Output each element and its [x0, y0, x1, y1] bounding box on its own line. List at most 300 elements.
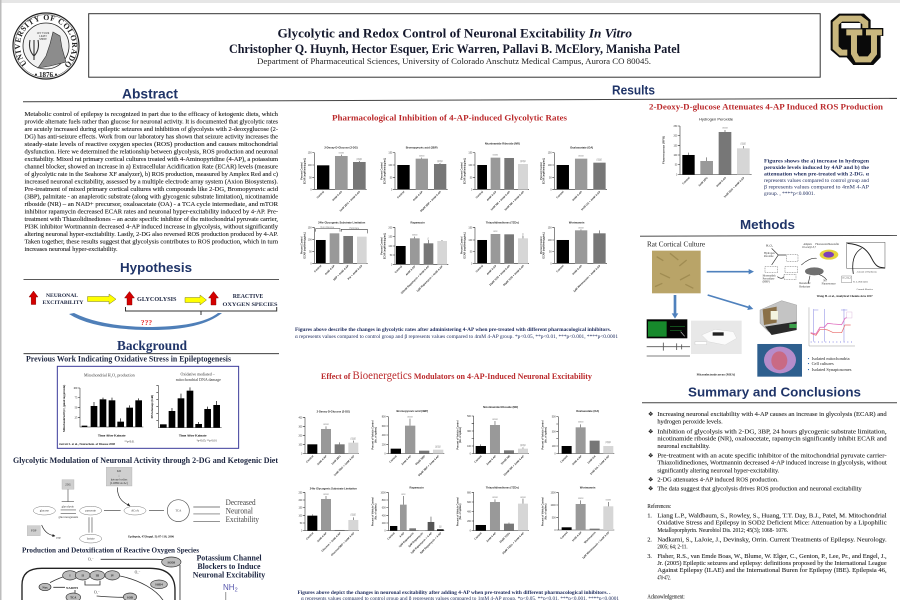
chart: thiazolidinediones: 10µM TZDs + 1mM 4-AP: [501, 531, 525, 555]
metabolite nodes: TCA: [175, 509, 182, 513]
chart: hydrogen peroxide: 50: [675, 165, 678, 167]
caption: glycolytic rate figures: Figures above describe the changes in glycolytic rates after administering 4-AP when pre-treated with different pharmacological inhibitors.: [295, 327, 612, 333]
chart: NR: ECAR (mpH/min/µg/mL): [463, 158, 466, 184]
chart: 2-DG: 2-Deoxy-D-Glucose (2-DG): [317, 410, 350, 414]
chart: wortmannin: 150: [548, 227, 552, 229]
chart: wortmannin: 1µM Wortmannin + 4mM 4-AP: [572, 264, 601, 293]
chart: rapamycin: 800: [382, 500, 386, 502]
chart: 2-DG: [301, 146, 367, 213]
chart: oxygen consumption curve: Amount of Hydrazine: [857, 270, 877, 273]
icon: red up arrow: [124, 292, 134, 305]
chart: mitochondrial H2O2 production: Mitochondrial H₂O₂ (pmol/mg protein): [62, 385, 66, 432]
chart: 2-DG: 1mM 2DG + 1mM 4-AP: [333, 454, 356, 477]
chart: 2-DG: 0: [301, 454, 303, 456]
diagram: glycolysis and ketogenic pathway: [27, 467, 259, 543]
list: conclusions: Pre-treatment with an acute specific inhibitor of the mitochondrial pyruvate carrier-: [657, 452, 887, 459]
chart: thiazolidinediones: 100: [468, 240, 473, 242]
list: conclusions: ❖: [648, 412, 654, 418]
chart: mitochondrial H2O2 production: [62, 372, 143, 438]
text: ROS figure description: represents values compared to control group and: [764, 178, 869, 184]
chart: 2-DG: ECAR (mpH/min/µg/mL): [303, 158, 306, 184]
list: sample types: Isolated mitochondria: [812, 356, 850, 361]
chart: wortmannin: Percent of Vehicle Control: [542, 497, 545, 526]
icon: red up arrow: [208, 292, 218, 305]
chart: glycogenic substrate limitation: 100: [308, 239, 312, 241]
chart: wortmannin: Wortmannin: [580, 486, 596, 490]
chart: 3BP: 1mM 4-AP: [400, 454, 412, 466]
logo: University of Colorado seal: LET YOUR: [37, 32, 50, 35]
chart: OA: 50: [549, 177, 552, 179]
chart: thiazolidinediones: ECAR (mpH/min/µg/mL): [463, 232, 466, 258]
chart: mitochondrial H2O2 production: Time After Kainate: [98, 434, 126, 438]
caption: glycolytic rate figures: α represents values compared to control group and β represents values compared to 4mM 4-AP group. *p<0.05, **p<0.01, ***p<0.001, ****p<0.0001: [295, 334, 618, 340]
text: ROS figure description: [764, 158, 870, 197]
chart: 3BP: Control: [388, 454, 398, 464]
heading: Hypothesis: Hypothesis: [120, 260, 192, 275]
chart: wortmannin: αααα: [606, 500, 612, 502]
chart: 3BP: ECAR (mpH/min/µg/mL): [383, 158, 386, 184]
chart: NR: Nicotinamide Riboside (NR): [483, 405, 518, 409]
chart: rapamycin: 1µM Rapamycin + 4mM 4-AP: [415, 264, 444, 293]
list: conclusions: [648, 411, 887, 493]
diagram: ROS production: O₂⁻: [88, 557, 94, 561]
references: Jr. (2005) Epileptic seizures and epilepsy: definitions proposed by the International League: [657, 560, 887, 567]
chart: ECAR time course: [809, 307, 855, 346]
chart: NR: 10mM NR: [500, 454, 511, 466]
diagram: ROS production: I: [69, 574, 71, 578]
logo: University of Colorado seal: • 1876 •: [35, 71, 58, 79]
chart: thiazolidinediones: β: [522, 234, 524, 236]
question marks: ???: [141, 318, 152, 327]
chart: NR: 10mM NR + 1mM 4-AP: [502, 454, 525, 477]
heading: Background: Background: [117, 338, 187, 353]
chart: mitochondrial H2O2 production: 50: [75, 406, 78, 409]
methods diagram: [647, 242, 885, 377]
chart: thiazolidinediones: Control: [475, 264, 484, 273]
chart: NR: Nicotinamide Riboside (NR): [485, 141, 520, 145]
chart: 3BP: 4mM 4-AP: [412, 190, 424, 202]
affiliation: Department of Pharmaceutical Sciences, University of Colorado Anschutz Medical Campus, Aurora CO 80045.: [257, 57, 651, 66]
chart: OA: 100: [552, 446, 556, 448]
chart: glycogenic substrate limitation: Control: [305, 531, 315, 541]
label: reactive oxygen species: [222, 294, 278, 308]
chart: rapamycin: 400: [382, 515, 386, 517]
label: neuronal excitability: NEURONAL: [46, 293, 78, 299]
list: sample types: Cell cultures: [812, 361, 834, 366]
chart: wortmannin: 1mM 4-AP: [571, 530, 583, 542]
PDP box: PDP: [31, 529, 37, 533]
chart: thiazolidinediones: ααα: [493, 231, 498, 233]
chart: hydrogen peroxide: 100: [673, 155, 678, 157]
chart citation: Jarrett S. et al., Neurochem. of Disease 2008: [59, 442, 116, 446]
diagram: ROS production: TCA: [70, 596, 77, 600]
panel: neuronal excitability bar charts: [298, 405, 614, 560]
icon: red up arrow: [29, 291, 38, 304]
chart: 3BP: 600: [382, 426, 386, 428]
chart: NR: 50: [470, 177, 473, 179]
outcome label: Excitability: [226, 515, 259, 524]
text: ROS figure description: group. , ****p<0.0001.: [764, 191, 815, 197]
chart: mitochondrial DNA damage: [150, 372, 222, 438]
chart: hydrogen peroxide: 0: [676, 175, 678, 177]
KD box: [106, 467, 132, 486]
chart: glycogenic substrate limitation: Control: [313, 264, 323, 273]
image: Amplex Red chemistry: H₂O₂: [766, 244, 773, 248]
title: Glycolytic and Redox Control of Neuronal Excitability In Vitro: [278, 27, 632, 41]
chart: hydrogen peroxide: αααα: [722, 128, 728, 130]
abstract text: increased neuronal excitability, assessed by a multiple electrode array system (Axion Biosystems).: [24, 178, 278, 186]
chart: OA: Oxaloacetate (OA): [570, 146, 593, 150]
chart: 2-DG: [298, 410, 359, 477]
list: sample types: ▪: [808, 367, 810, 372]
chart: glycogenic substrate limitation: 250: [298, 492, 303, 494]
chart: glycogenic substrate limitation: Percent Control: [301, 236, 304, 254]
chart: 2-DG: ββββ: [357, 159, 363, 161]
diagram: ROS production: III: [96, 574, 100, 578]
chart: thiazolidinediones: 10µM TZD + 4mM 4-AP: [488, 264, 511, 287]
subheading: previous work: Previous Work Indicating Oxidative Stress in Epileptogenesis: [26, 354, 232, 364]
chart: 3BP: 50µM 3BP: [414, 454, 426, 466]
chart: OA: ββββ: [597, 160, 603, 162]
chart: OA: Percent Control: [540, 162, 543, 180]
arrow: yellow: [185, 295, 206, 305]
arrow: to MEA: [672, 295, 678, 319]
chart: rapamycin: [372, 486, 444, 555]
chart: OA: 100: [548, 165, 552, 167]
chart: OA: αααα: [578, 156, 584, 158]
chart: hydrogen peroxide: 1mM 2DG + 4mM 4-AP: [723, 176, 746, 199]
chart: 2-DG: 100: [308, 165, 312, 167]
image: Amplex Red chemistry: Fluorescence: [822, 283, 836, 286]
chart: 2-DG: 2-Deoxy-D-Glucose (2-DG): [324, 146, 358, 150]
image: Amplex Red chemistry: Amplex: [803, 243, 813, 246]
chart: 3BP: Bromopyruvic acid (3BP): [406, 146, 438, 150]
hypothesis rule: [24, 278, 279, 280]
list: conclusions: hydrogen peroxide levels.: [657, 419, 723, 425]
references: [647, 503, 887, 581]
heading: neuronal excitability: Effect of Bioenergetics Modulators on 4-AP-Induced Neuronal Excitability: [321, 370, 593, 382]
list: conclusions: significantly altering neuronal hyper-excitability.: [657, 468, 780, 475]
chart: OA: Percent of Vehicle Control: [542, 420, 545, 449]
arrow: feedback curve: [69, 313, 222, 330]
abstract text: Taken together, these results suggest that glycolysis contributes to ROS production, which in turn: [24, 238, 279, 246]
chart: NR: 100: [467, 446, 472, 448]
chart: rapamycin: 5µM Rapamycin + 4-AP: [419, 531, 443, 555]
chart: OA: [540, 146, 607, 211]
text: ROS figure description: attenuation when pre-treated with 2-DG. α: [764, 172, 869, 178]
abstract text: Pre-treatment of mixed primary cortical cultures with compounds like 2-DG, Bromopyruvic acid: [24, 186, 279, 193]
chart: wortmannin: Control: [559, 530, 569, 540]
chart: thiazolidinediones: Thiazolidinediones (TZDs): [486, 220, 519, 224]
logo: University of Colorado seal: SHINE: [39, 38, 47, 41]
chart: thiazolidinediones: 0: [471, 263, 473, 265]
icon: 4-AP molecule: 2: [235, 588, 238, 594]
diagram: ROS production: NADPH: [66, 586, 78, 590]
label: neuronal excitability: [43, 293, 83, 306]
chart: thiazolidinediones: 200: [467, 521, 472, 523]
label: glycolysis: GLYCOLYSIS: [137, 297, 176, 303]
chart: wortmannin: Wortmannin: [569, 220, 585, 224]
chart: 3BP: 50µM 3BP + 4mM 4-AP: [419, 190, 442, 213]
chart: glycogenic substrate limitation: 100: [298, 515, 303, 517]
chart: glycogenic substrate limitation: Pal + 4mM 4-AP: [346, 264, 364, 281]
chart: glycogenic substrate limitation: 50: [300, 523, 303, 525]
chart: rapamycin: Rapamycin: [410, 486, 424, 490]
chart: wortmannin: ECAR (mpH/min/µg/mL): [543, 232, 546, 258]
KD box: (LOHR/AcAc): [110, 481, 128, 485]
heading: glycolytic rates: Pharmacological Inhibition of 4-AP-induced Glycolytic Rates: [332, 113, 568, 123]
chart: 2-DG: Control: [305, 454, 315, 464]
image: Amplex Red chemistry: Reductase: [799, 285, 811, 288]
chart: NR: Percent of Vehicle Control: [456, 420, 459, 449]
citation: Wang H. et al., Analytical Chemia Acta 2017: [817, 295, 873, 298]
chart: wortmannin: [540, 220, 607, 293]
list: sample types: ▪: [808, 361, 810, 366]
chart: rapamycin: 200: [388, 227, 393, 229]
list: conclusions: The data suggest that glycolysis drives ROS production and neuronal excitability: [657, 487, 863, 493]
chart: thiazolidinediones: 600: [467, 502, 472, 504]
chart: wortmannin: 50: [549, 252, 552, 254]
image: Amplex Red chemistry: Resazurin/: [799, 282, 811, 285]
image: Amplex Red chemistry: Horseradish: [763, 275, 776, 278]
chart: glycogenic substrate limitation: 1mM 4-AP: [316, 531, 328, 543]
chart: 2-DG: Control: [316, 190, 325, 199]
outcome label: Decreased: [226, 498, 256, 507]
chart: 3BP: 150: [388, 153, 393, 155]
abstract text: excitability. Mixed rat primary cortical cultures treated with 4-Aminopyridine (4-AP), a potassium: [24, 156, 278, 163]
chart: thiazolidinediones: 50: [470, 252, 473, 254]
chart: glycogenic substrate limitation: 4mM 4-AP: [324, 264, 336, 276]
chart: glycogenic substrate limitation: Glucose + 1mM 4-AP: [320, 531, 342, 553]
chart: glycogenic substrate limitation: ECAR (mpH/min/µg/mL): [303, 232, 306, 258]
chart: 3BP: 100: [388, 165, 393, 167]
chart: NR: Control: [475, 190, 484, 199]
chart: wortmannin: [542, 486, 614, 560]
abstract text: dysfunction. Here we determined the relationship between glycolysis, ROS production and neuronal: [24, 148, 278, 156]
chart: wortmannin: 4mM 4-AP: [571, 264, 583, 276]
outcome label: Neuronal: [226, 507, 254, 516]
chart: 3BP: 0: [391, 189, 393, 191]
chart: rapamycin: ECAR (mpH/min/µg/mL): [383, 233, 386, 259]
references: 3.: [647, 554, 652, 560]
chart: NR: 1mM 4-AP: [485, 454, 497, 466]
chart: hydrogen peroxide: Control: [681, 176, 691, 185]
chart: hydrogen peroxide: 150: [673, 145, 678, 147]
chart: 3BP: 400: [382, 435, 386, 437]
label: MEA: Microelectrode array (MEA): [697, 373, 735, 377]
image: MEA recording: [647, 319, 687, 338]
list: sample types: ▪: [808, 356, 810, 361]
diagram: ROS production: SOD: [127, 595, 134, 599]
chart: 3BP: αααα: [407, 417, 413, 419]
abstract text: are acutely increased during epileptic seizures and inhibition of glycolysis with 2-deoxyglucose (2-: [24, 126, 278, 133]
chart: wortmannin: 500: [552, 517, 556, 519]
image: Amplex Red chemistry: (HRP): [763, 281, 770, 284]
chart: oxygen consumption curve: [E₀] [L₀]: [843, 277, 851, 280]
logo: University of Colorado seal: LIGHT: [39, 35, 47, 38]
chart: thiazolidinediones: Thiazolidinediones (TZDs): [486, 486, 519, 490]
diagram: glycolysis and ketogenic pathway: glycolysis: [62, 504, 75, 508]
chart: 3BP: ββββ: [435, 446, 441, 448]
chart: thiazolidinediones: 400: [467, 512, 472, 514]
chart: OA: 4mM 4-AP: [571, 190, 583, 202]
image: Amplex Red chemistry: No: [823, 280, 827, 283]
metabolite nodes: glucose: [40, 509, 50, 513]
chart: rapamycin: ββ: [439, 526, 442, 528]
chart: NR: 150: [468, 153, 473, 155]
list: conclusions: ❖: [648, 429, 654, 435]
diagram: glycolysis and ketogenic pathway: gluconeogenesis: [58, 515, 79, 519]
chart: wortmannin: 1µM Wortmannin + 1mM 4-AP: [581, 530, 610, 560]
text: potassium channel blockers: Blockers to Induce: [197, 562, 261, 571]
abstract text: provide alternate fuels rather than glucose for neuronal activity. It is documented that glycolytic rates: [24, 118, 278, 126]
chart: NR: Control: [473, 454, 483, 464]
outcome label: [226, 498, 259, 524]
image: Seahorse analyzer: [760, 301, 797, 335]
chart: glycogenic substrate limitation: 24hr Glycogenic Substrate Limitation: [310, 486, 357, 490]
chart: thiazolidinediones: 150: [468, 227, 473, 229]
chart: thiazolidinediones: αααα: [492, 497, 498, 499]
heading: ROS production: 2-Deoxy-D-glucose Attenuates 4-AP Induced ROS Production: [649, 102, 883, 112]
chart: 2-DG: 400: [298, 417, 303, 419]
chart: rapamycin: 600: [382, 508, 386, 510]
chart: OA: 150: [548, 153, 552, 155]
chart: thiazolidinediones: 0: [470, 531, 472, 533]
image: Amplex Red chemistry: Fluorescent/Resorufin: [815, 243, 840, 246]
metabolite nodes: [33, 500, 189, 543]
list: conclusions: Inhibition of glycolysis with 2-DG, 3BP, 24 hours glycogenic substrate limitation,: [657, 428, 887, 435]
heading: Abstract: Abstract: [122, 86, 178, 102]
diagram: glycolysis and ketogenic pathway: pap: [57, 536, 61, 540]
text: potassium channel blockers: Neuronal Excitability: [193, 570, 265, 580]
chart: glycogenic substrate limitation: 0: [310, 263, 312, 265]
PDP box: [27, 526, 40, 536]
chart: 2-DG: 150: [308, 153, 312, 155]
references: Oxidative Stress and Epilepsy in SOD2 Deficient Mice: Attenuation by a Lipophilic: [657, 520, 887, 527]
chart: rapamycin: ααα: [401, 494, 406, 496]
abstract text: increases neuronal hyper-excitability.: [24, 246, 118, 253]
chart: wortmannin: Percent Control: [540, 236, 543, 254]
chart: thiazolidinediones: 4mM 4-AP: [485, 264, 498, 276]
list: conclusions: nicotinamide riboside (NR), oxaloacetate, rapamycin significantly inhibit ECAR and: [657, 436, 887, 443]
chart: OA: 1mM OA + 4mM 4-AP: [580, 190, 602, 211]
heading: Results: Results: [612, 84, 655, 98]
list: conclusions: ❖: [648, 453, 654, 459]
2DG box: [62, 480, 74, 489]
panel: oxidative stress bar charts: [57, 366, 239, 448]
chart: wortmannin: Control: [555, 264, 565, 273]
references: 2005; 64; 2-11.: [657, 545, 688, 551]
chart: NR: (No. of spikes): [460, 427, 462, 443]
chart: NR: 100: [468, 165, 473, 167]
chart: 3BP: Bromopyruvic acid (3BP): [396, 409, 428, 413]
hypothesis diagram: [29, 291, 278, 330]
chart: 3BP: Percent of Vehicle Control: [372, 420, 375, 449]
2DG box: 2DG: [65, 483, 72, 487]
chart: OA: Control: [559, 454, 569, 464]
chart: OA: Control: [555, 190, 565, 199]
chart: mitochondrial H2O2 production: 25: [75, 416, 78, 419]
list: conclusions: neuronal excitability.: [657, 444, 710, 450]
chart: glycogenic substrate limitation: ββββ: [351, 514, 357, 516]
authors: Christopher Q. Huynh, Hector Esquer, Eric Warren, Pallavi B. McElory, Manisha Patel: [229, 42, 681, 56]
panel: oxidative stress bar charts: **p<0.01: [124, 441, 135, 444]
chart: hydrogen peroxide: Hydrogen Peroxide: [699, 116, 734, 121]
chart: thiazolidinediones: [461, 220, 529, 287]
chart: rapamycin: αααα: [412, 234, 418, 236]
chart: OA: 500: [552, 417, 556, 419]
abstract text: steady-state levels of reactive oxygen species (ROS) production and causes mitochondrial: [24, 141, 278, 148]
section rule: [23, 98, 897, 102]
chart: wortmannin: 0: [554, 530, 556, 532]
subheading: production and detoxification: Production and Detoxification of Reactive Oxygen Species: [22, 546, 199, 555]
chart: rapamycin: 0: [391, 264, 393, 266]
chart: NR: 0: [470, 454, 472, 456]
diagram: ROS production: II: [81, 574, 85, 578]
chart: oxygen consumption curve: [842, 242, 885, 291]
chart: NR: αααα: [493, 155, 499, 157]
label: reactive oxygen species: REACTIVE: [233, 294, 263, 300]
diagram: ROS production: Nox: [42, 585, 48, 589]
chart: rapamycin: β: [428, 238, 430, 240]
chart: OA: Oxaloacetate (OA): [576, 409, 599, 413]
chart: OA: [542, 409, 614, 476]
arrow: yellow: [88, 294, 116, 304]
chart: glycogenic substrate limitation: 200: [298, 500, 303, 502]
chart: OA: 1mM OA + 1mM 4-AP: [589, 454, 611, 476]
chart: mitochondrial DNA damage: Time After Kainate: [179, 434, 207, 438]
abstract text: (3BP), palmitate - an anaplerotic substrate (along with glycogenic substrate limitation), nicotinamide: [24, 194, 278, 200]
caption: glycolytic rate figures: [295, 327, 618, 340]
chart: rapamycin: Percent Control: [381, 237, 384, 255]
chart: NR: Percent Control: [461, 162, 464, 180]
chart: glycogenic substrate limitation: Glucose/3BP + 1mM 4-AP: [330, 531, 356, 557]
chart: hydrogen peroxide: 250: [673, 126, 678, 128]
heading: Summary and Conclusions: Summary and Conclusions: [688, 385, 861, 400]
icon: 4-AP molecule: NH: [223, 583, 235, 592]
chart: rapamycin: Percent of Vehicle Control: [372, 497, 375, 526]
chart: rapamycin: (No. of spikes): [375, 503, 377, 520]
diagram: glycolysis and ketogenic pathway: Epilepsia, 47(Suppl. 5):87-118, 2006: [128, 534, 175, 538]
chart: 3BP: 0: [384, 454, 386, 456]
label: neuronal excitability: EXCITABILITY: [43, 300, 83, 306]
chart: 2-DG: 4mM 4-AP: [331, 190, 343, 202]
chart: 2-DG: ββββ: [351, 439, 357, 441]
image: Amplex Red chemistry: Peroxidase: [763, 278, 775, 281]
references: 1.: [647, 513, 652, 519]
chart: oxygen consumption curve: Cascade Kinetics: [857, 288, 873, 291]
references: 470-472.: [657, 575, 671, 581]
chart: NR: 1mM NR + 4mM 4-AP: [489, 190, 511, 211]
abstract text: PI3K inhibitor Wortmannin decreased 4-AP induced increase in glycolysis, without significantly: [24, 224, 279, 230]
list: conclusions: ❖: [648, 477, 654, 483]
header box: [89, 14, 820, 77]
chart: 3BP: 50µM 3BP + 1mM 4-AP: [417, 454, 440, 477]
chart: 3BP: 800: [382, 417, 386, 419]
heading: Methods: Methods: [740, 217, 795, 232]
chart: wortmannin: (No. of spikes): [545, 503, 547, 520]
background rule: [24, 353, 279, 355]
chart: 2-DG: 100: [298, 444, 303, 446]
chart: thiazolidinediones: 10µM TZDs: [498, 531, 511, 544]
metabolite nodes: lactate: [87, 537, 95, 541]
panel: oxidative stress bar charts: *p<0.05; **p<0.01: [196, 439, 217, 442]
chart: mitochondrial H2O2 production: Mitochondrial H₂O₂ production: [84, 372, 135, 377]
abstract text: [24, 111, 279, 253]
subheading: glycolytic modulation: Glycolytic Modulation of Neuronal Activity through 2-DG and Ketogenic Diet: [13, 456, 278, 465]
diagram: ROS production: O₂⁻: [94, 591, 100, 595]
list: conclusions: 2-DG attenuates 4-AP induced ROS production.: [657, 477, 779, 483]
